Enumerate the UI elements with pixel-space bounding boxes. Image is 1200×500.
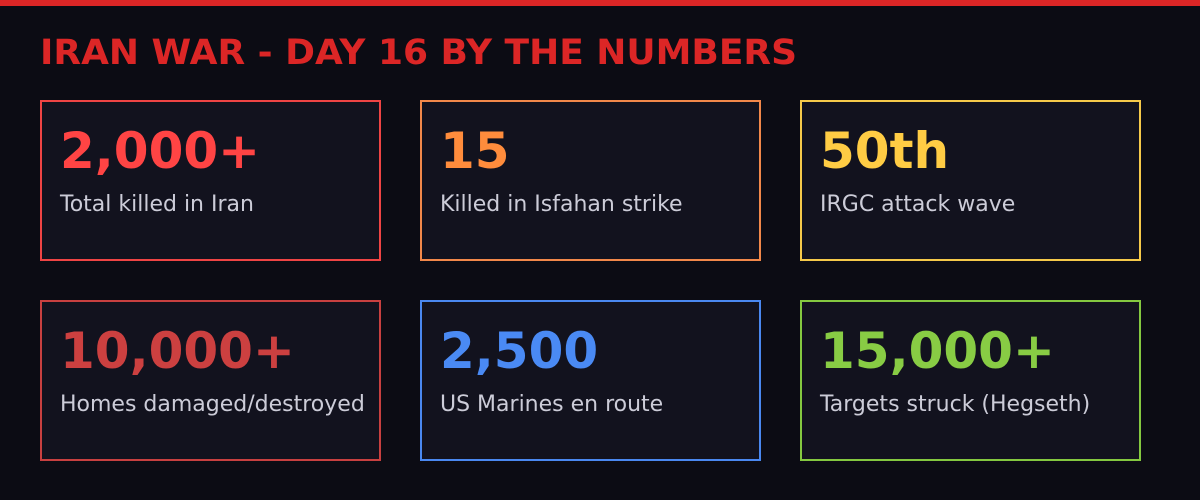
panel: IRGC wave: IRGC attack wave <box>820 192 1015 217</box>
title: IRAN WAR - DAY 16 BY THE NUMBERS <box>40 33 797 73</box>
panel: homes: 10,000+ <box>60 322 295 380</box>
panel: targets: 15,000+ <box>820 322 1055 380</box>
panel: targets: Targets struck (Hegseth) <box>819 392 1090 417</box>
panel: homes: Homes damaged/destroyed <box>60 392 365 417</box>
panel: total killed: Total killed in Iran <box>59 192 254 217</box>
panel: Isfahan strike <box>421 101 760 260</box>
panel: Isfahan strike: Killed in Isfahan strike <box>440 192 683 217</box>
panel: total killed <box>41 101 380 260</box>
panel: total killed: 2,000+ <box>60 122 260 180</box>
panel: IRGC wave: 50th <box>820 122 949 180</box>
panel: marines <box>421 301 760 460</box>
panel: targets <box>801 301 1140 460</box>
panel: Isfahan strike: 15 <box>440 122 510 180</box>
top accent bar <box>0 0 1200 6</box>
panel: marines: US Marines en route <box>440 392 663 417</box>
panel: marines: 2,500 <box>440 322 598 380</box>
panel: homes <box>41 301 380 460</box>
panel: IRGC wave <box>801 101 1140 260</box>
